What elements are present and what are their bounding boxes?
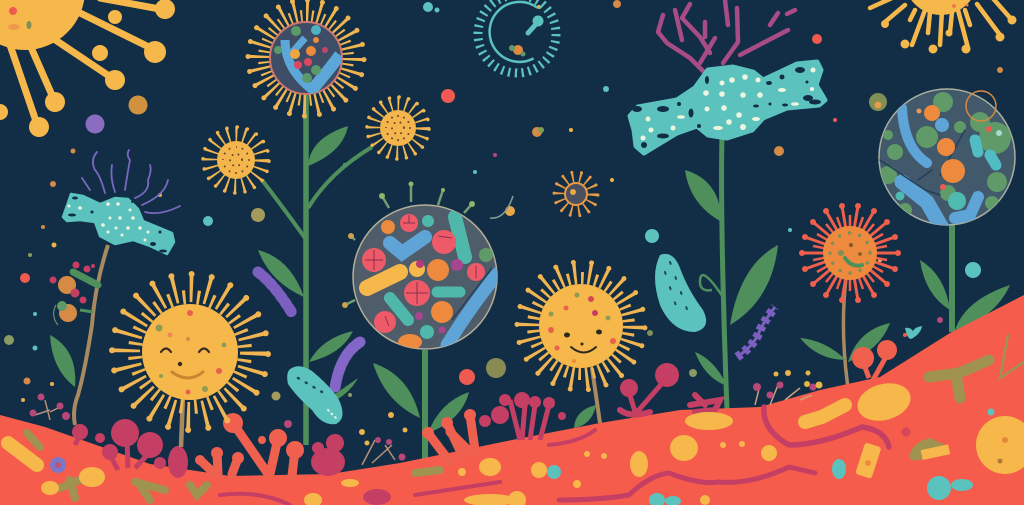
flower head: small yellow right [367,97,429,159]
fungi and coral clusters [30,340,897,478]
flower: orange with red rays [799,203,901,388]
flower head: small yellow left [203,127,269,193]
faced sun: left [112,274,268,447]
teal flower: top centre-right with tendrils [630,0,825,410]
ground: red soil [0,295,1024,505]
microbe ring: top centre [478,0,556,73]
soil microbes [8,335,1024,505]
faced sun: right [517,262,645,428]
flower: tall plant with stem and leaves [258,90,372,445]
flower: small dark microbe [554,172,598,216]
teal flower: left [50,150,180,425]
bacteria sphere: central [342,182,498,462]
flower head: top microbe disc [248,0,364,116]
sun: top left [0,0,175,137]
teal bean [655,254,706,332]
bacteria sphere: right with stem [879,89,1015,332]
tiny bugs [490,93,887,218]
teal bean: lower left over stem [287,366,343,424]
sun: top right [870,0,1016,54]
